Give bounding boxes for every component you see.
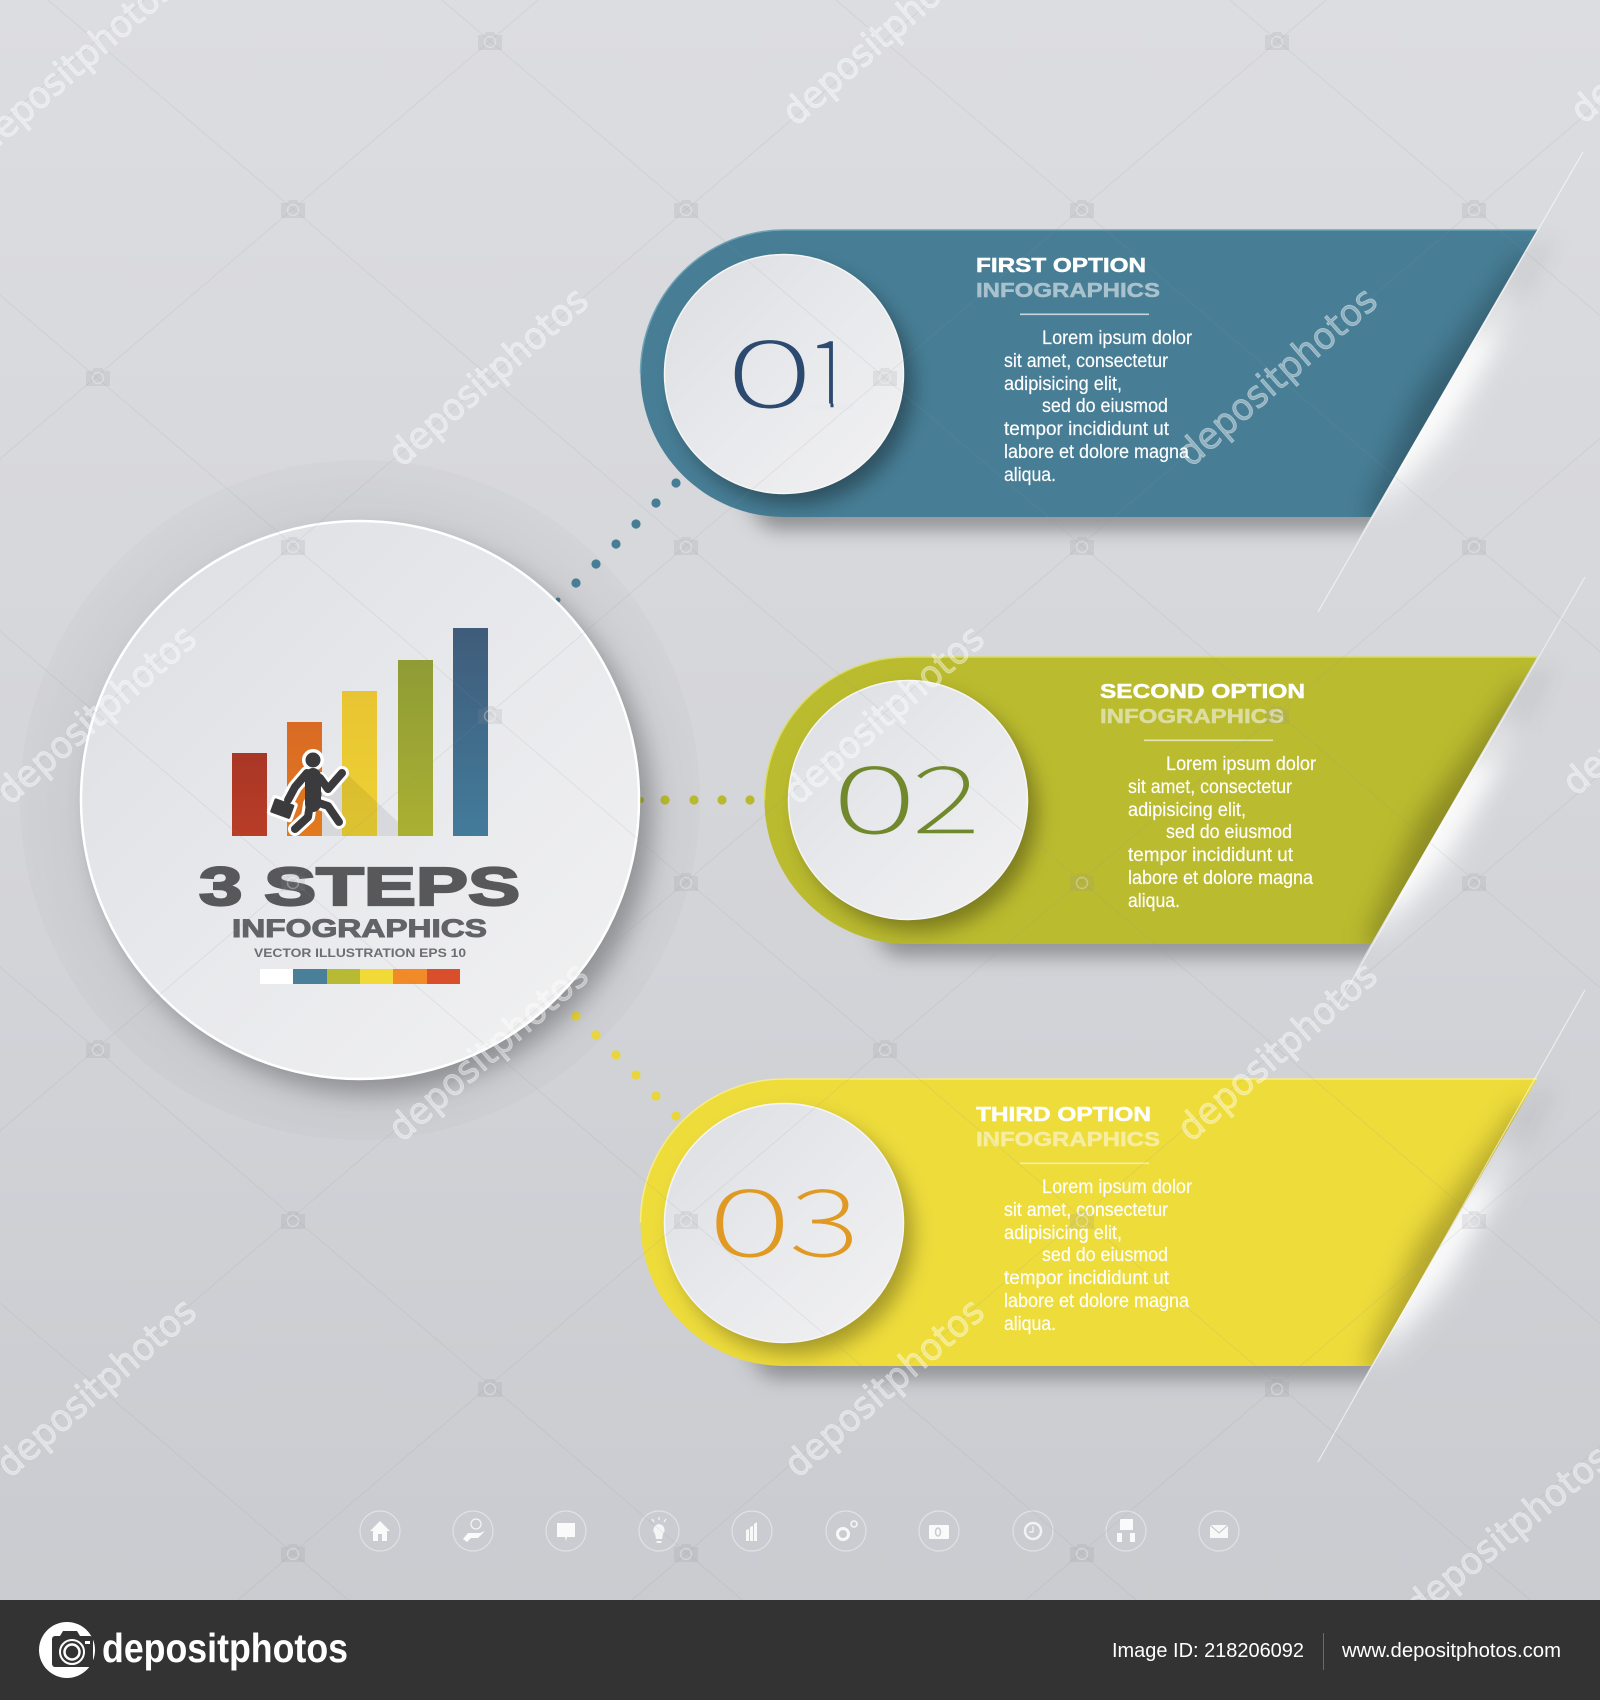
icon: rising chart [732, 1511, 772, 1551]
heading: 3 steps: 3 STEPS [199, 857, 520, 917]
card text: first option: aliqua. [1004, 465, 1056, 486]
number badge 02: 0 [832, 726, 917, 860]
footer bar [0, 1600, 1600, 1700]
number badge 01 [664, 254, 913, 505]
number badge 01: 1 [805, 299, 853, 434]
icon: running businessman [270, 752, 342, 829]
icon: hand with coin [453, 1511, 493, 1551]
card text: second option: sit amet, consectetur [1128, 777, 1293, 798]
footer logo: depositphotos [102, 1625, 348, 1671]
number badge 02 [788, 680, 1037, 931]
dotted connector: to first option [556, 478, 681, 602]
card text: third option: sed do eiusmod [1042, 1245, 1168, 1266]
card text: second option: aliqua. [1128, 891, 1180, 912]
icon: home [360, 1511, 400, 1551]
card text: third option: adipisicing elit, [1004, 1223, 1122, 1244]
icon: presentation team [1106, 1511, 1146, 1551]
website: www.depositphotos.com [1341, 1640, 1561, 1662]
icon: banknote [919, 1511, 959, 1551]
panel: first option band [640, 152, 1583, 612]
dotted connector: to third option [571, 1011, 681, 1121]
watermark text: depositphotos [1169, 953, 1386, 1150]
caption: vector illustration: VECTOR ILLUSTRATION EPS 10 [254, 948, 466, 960]
card text: first option: FIRST OPTION [976, 255, 1146, 277]
icon: envelope [1199, 1511, 1239, 1551]
halo behind main circle [20, 460, 700, 1140]
card text: third option: INFOGRAPHICS [976, 1129, 1160, 1151]
icon: gears [826, 1511, 866, 1551]
footer logo [39, 1622, 348, 1678]
card text: first option: sed do eiusmod [1042, 396, 1168, 417]
watermark text: depositphotos [776, 1289, 993, 1486]
icon: speech bubble [546, 1511, 586, 1551]
card text: second option [1100, 681, 1317, 912]
card text: second option: labore et dolore magna [1128, 868, 1313, 889]
panel: third option band [640, 990, 1585, 1462]
image id: Image ID: 218206092 [1112, 1640, 1304, 1662]
card text: third option: tempor incididunt ut [1004, 1268, 1170, 1289]
card text: first option: labore et dolore magna [1004, 442, 1189, 463]
number badge 03: 0 [708, 1148, 791, 1283]
card text: second option: INFOGRAPHICS [1100, 706, 1284, 728]
icon: light bulb [639, 1511, 679, 1551]
card text: first option: adipisicing elit, [1004, 374, 1122, 395]
card text: first option: sit amet, consectetur [1004, 351, 1169, 372]
icon row [360, 1511, 1239, 1551]
card text: first option: Lorem ipsum dolor [1042, 328, 1193, 349]
colour strip [260, 969, 460, 984]
watermark text: depositphotos [380, 278, 597, 475]
bar chart [232, 628, 488, 836]
watermark camera marks [86, 32, 1486, 1562]
number badge 01: 0 [726, 299, 813, 434]
number badge 02: 2 [912, 725, 980, 860]
card text: third option: THIRD OPTION [976, 1104, 1151, 1126]
card text: second option: SECOND OPTION [1100, 681, 1305, 703]
card text: second option: tempor incididunt ut [1128, 845, 1294, 866]
card text: second option: adipisicing elit, [1128, 800, 1246, 821]
card text: second option: Lorem ipsum dolor [1166, 754, 1317, 775]
main circle [81, 521, 652, 1094]
number badge 03 [664, 1104, 913, 1354]
card text: third option: labore et dolore magna [1004, 1291, 1189, 1312]
watermark text: depositphotos [380, 953, 597, 1150]
watermark text: depositphotos [776, 616, 993, 813]
card text: third option: sit amet, consectetur [1004, 1200, 1169, 1221]
card text: first option: tempor incididunt ut [1004, 419, 1170, 440]
card text: third option: aliqua. [1004, 1314, 1056, 1335]
card text: first option: INFOGRAPHICS [976, 280, 1160, 302]
card text: third option [976, 1104, 1193, 1335]
card text: second option: sed do eiusmod [1166, 822, 1292, 843]
card text: third option: Lorem ipsum dolor [1042, 1177, 1193, 1198]
watermark text: depositphotos [1169, 278, 1386, 475]
number badge 03: 3 [789, 1149, 859, 1283]
subheading: infographics: INFOGRAPHICS [232, 915, 487, 943]
card text: first option [976, 255, 1193, 486]
icon: clock [1013, 1511, 1053, 1551]
dotted connector: to second option [638, 795, 755, 805]
panel: second option band [764, 577, 1585, 1005]
